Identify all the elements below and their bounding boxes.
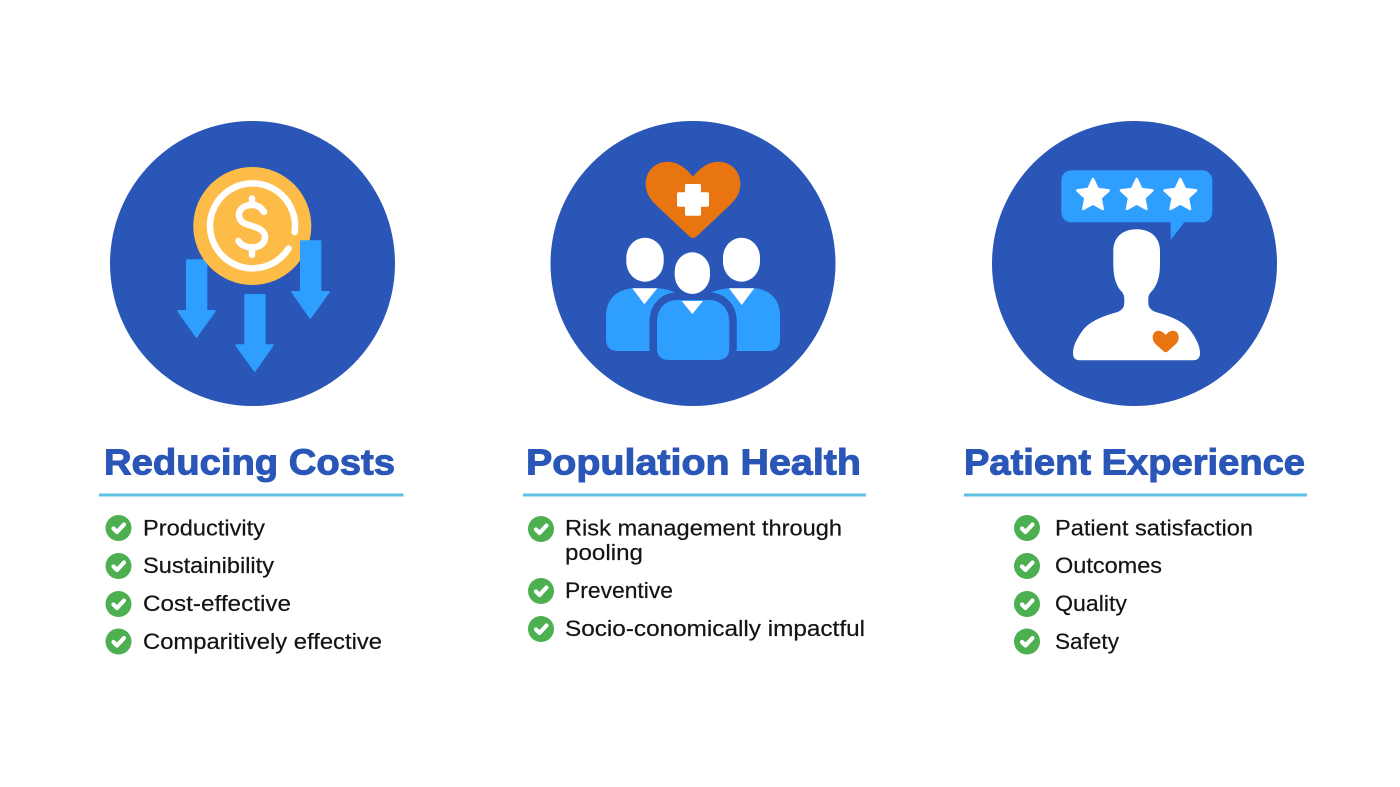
divider [523,494,866,496]
divider [964,494,1307,496]
item: Socio-conomically impactful: Socio-conomically impactful [565,616,865,641]
item: Risk management through pooling: pooling [565,540,643,565]
item: Preventive: Preventive [565,578,673,603]
item: Productivity: Productivity [143,516,265,541]
item: Quality: Quality [1055,591,1127,616]
item: Risk management through pooling [528,516,842,565]
item: Safety: Safety [1055,629,1119,654]
icon: patient with star rating [992,121,1277,406]
item: Comparitively effective: Comparitively effective [143,629,382,654]
icon: three people under a medical heart [550,121,836,406]
item: Sustainibility: Sustainibility [143,553,274,578]
item: Quality [1014,591,1127,617]
item: Risk management through pooling: Risk management through [565,516,842,541]
panel: population health [523,121,866,642]
item: Outcomes [1014,553,1162,579]
item: Preventive [528,578,673,604]
list: population health items [528,516,865,642]
heading: Patient Experience: Patient Experience [964,442,1305,482]
heading: Population Health: Population Health [526,442,861,482]
panel: patient experience [964,121,1307,654]
icon: falling coin with down arrows [110,121,395,406]
item: Cost-effective [106,591,291,617]
list: patient experience items [1014,515,1253,654]
item: Safety [1014,628,1119,654]
heading: Reducing Costs: Reducing Costs [104,442,395,482]
item: Outcomes: Outcomes [1055,553,1162,578]
panel: reducing costs [99,121,404,654]
item: Patient satisfaction: Patient satisfaction [1055,516,1253,541]
divider [99,494,404,496]
item: Productivity [106,515,265,541]
list: reducing costs items [106,515,382,654]
item: Cost-effective: Cost-effective [143,591,291,616]
item: Sustainibility [106,553,274,579]
